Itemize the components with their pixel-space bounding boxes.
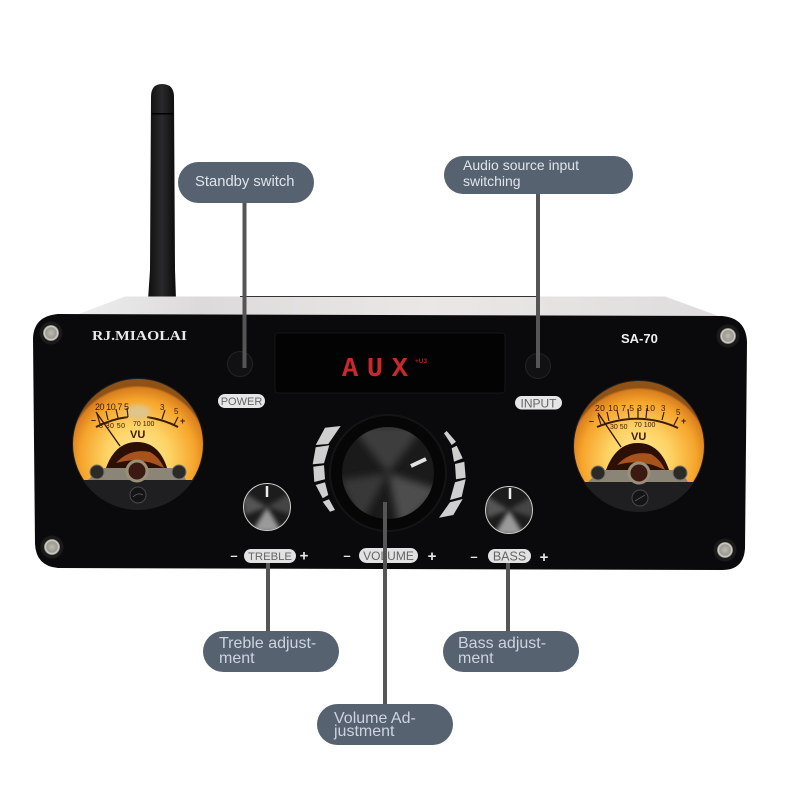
connector: standby xyxy=(242,202,246,368)
callout: volume adjustment: Volume Ad- xyxy=(334,710,416,727)
callout: audio source input switching: Audio source input xyxy=(463,157,579,173)
callout: audio source input switching xyxy=(444,156,633,194)
callout: bass adjustment: Bass adjust- xyxy=(458,635,546,652)
treble label: TREBLE xyxy=(248,551,292,563)
volume label: VOLUME xyxy=(363,549,414,563)
VU meter left: VU xyxy=(130,429,145,441)
callout: bass adjustment: ment xyxy=(458,650,494,667)
VU meter left: 3 xyxy=(160,403,165,412)
connector: treble xyxy=(266,563,270,632)
callout: treble adjustment: ment xyxy=(219,650,255,667)
VU meter left: 3 30 50 xyxy=(99,423,125,430)
callout: treble adjustment: Treble adjust- xyxy=(219,635,316,652)
screw top left xyxy=(40,322,62,344)
callout: volume adjustment xyxy=(317,704,453,745)
treble knob xyxy=(243,483,291,531)
bass label: + xyxy=(540,549,549,566)
screw bottom right xyxy=(714,538,736,562)
amplifier chassis top xyxy=(68,296,724,318)
connector: input xyxy=(536,193,540,368)
volume label: – xyxy=(343,548,351,563)
power label: POWER xyxy=(221,396,262,408)
VU meter right: – xyxy=(589,416,594,426)
VU meter left: 70 100 xyxy=(133,421,155,428)
volume scale right xyxy=(439,431,466,518)
display indicator: +U3 xyxy=(415,358,427,365)
screw bottom left xyxy=(40,536,64,558)
VU meter right: + xyxy=(681,416,686,426)
volume scale left xyxy=(313,426,341,512)
input button xyxy=(526,354,550,378)
VU meter right: 30 50 xyxy=(610,424,628,431)
VU meter right xyxy=(573,380,705,512)
amplifier front panel xyxy=(33,314,747,570)
input label: INPUT xyxy=(520,396,557,410)
treble label: – xyxy=(230,548,238,563)
model text: SA-70 xyxy=(621,331,658,346)
display readout: AUX xyxy=(342,355,409,385)
callout: bass adjustment xyxy=(443,631,579,672)
callout: audio source input switching: switching xyxy=(463,173,521,189)
connector: volume xyxy=(383,502,387,705)
callout: standby switch xyxy=(178,162,314,203)
VU meter left xyxy=(72,378,204,510)
bass knob xyxy=(485,486,533,534)
callout: treble adjustment xyxy=(203,631,339,672)
bass label: BASS xyxy=(493,550,526,564)
callout: standby switch: Standby switch xyxy=(195,174,295,190)
bass label: – xyxy=(470,549,478,564)
volume label xyxy=(343,548,437,565)
treble label xyxy=(230,548,309,564)
power button xyxy=(228,352,252,376)
VU meter right: 20 10 7 5 3 10 xyxy=(595,403,655,413)
VU meter left: – xyxy=(91,415,96,425)
VU meter right: 3 xyxy=(661,404,666,413)
treble label: + xyxy=(300,548,309,564)
VU meter left: 5 xyxy=(174,407,179,416)
volume label: + xyxy=(428,548,437,565)
brand text: RJ.MIAOLAI xyxy=(92,328,187,343)
VU meter right: VU xyxy=(631,431,646,443)
callout: volume adjustment: justment xyxy=(333,723,395,740)
connector: bass xyxy=(506,563,510,632)
VU meter left: 20 10 7 5 xyxy=(95,402,129,412)
volume knob xyxy=(330,415,446,531)
screw top right xyxy=(716,324,740,348)
VU meter left: + xyxy=(180,416,185,426)
bass label xyxy=(470,549,549,566)
VU meter right: 70 100 xyxy=(634,422,656,429)
display panel xyxy=(275,333,505,393)
VU meter right: 5 xyxy=(676,408,681,417)
antenna xyxy=(148,84,176,300)
